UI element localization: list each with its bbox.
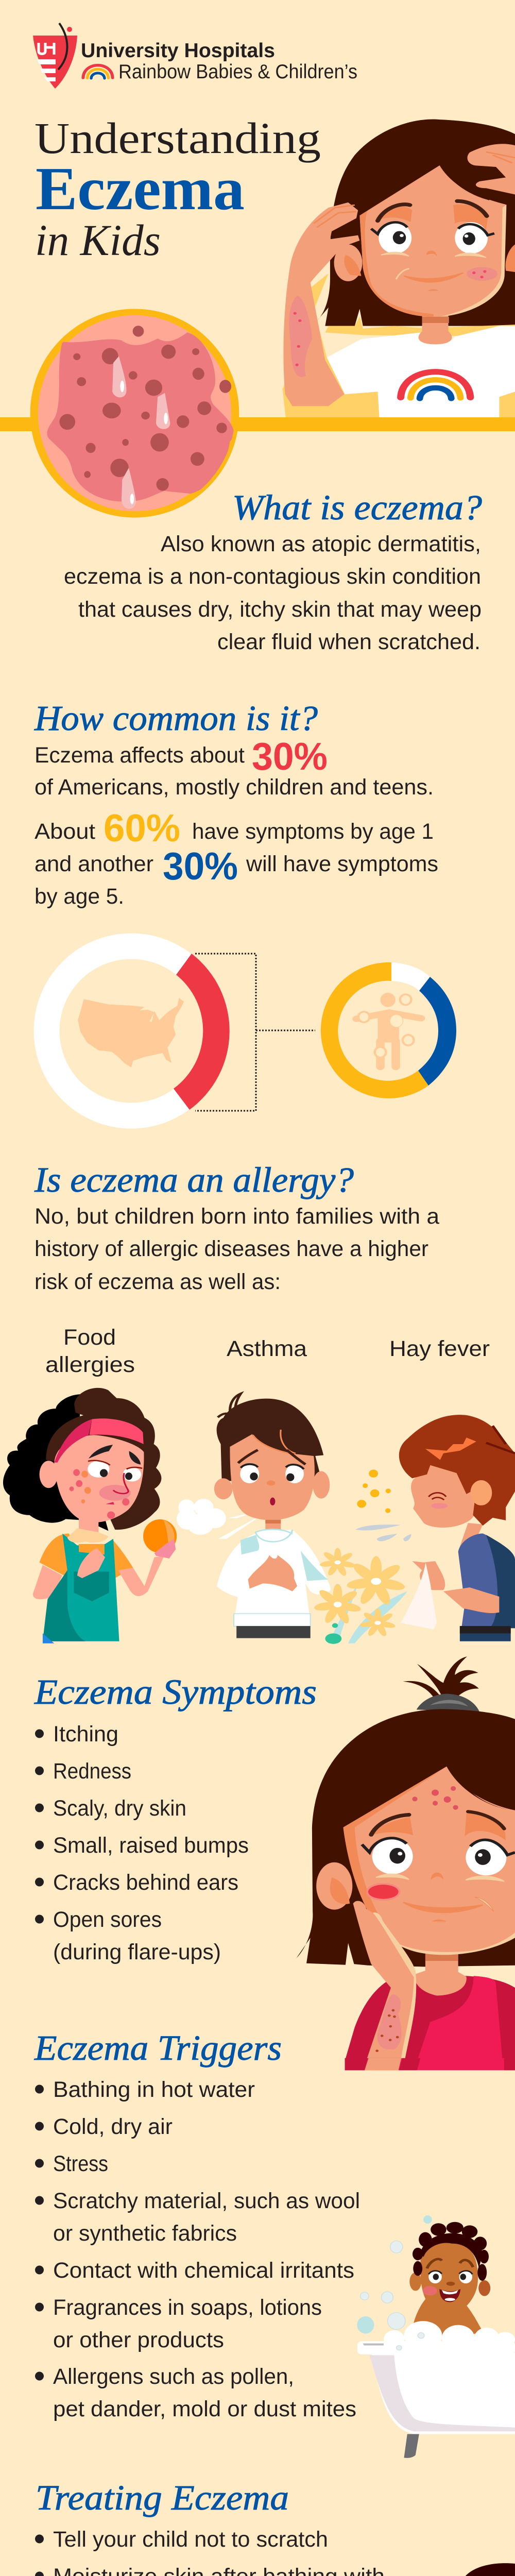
label: Asthma: Asthma	[227, 1336, 307, 1361]
list: triggers: Allergens such as pollen,	[53, 2364, 294, 2389]
text block: prevalence with statistics: of Americans, mostly children and teens.	[35, 775, 434, 800]
title line: in Kids: in Kids	[35, 215, 161, 265]
heading: What is eczema?: What is eczema?	[232, 488, 482, 527]
illustration: asthma boy	[214, 1394, 331, 1638]
text block: definition: eczema is a non-contagious skin condition	[64, 564, 481, 589]
list: symptoms: Scaly, dry skin	[53, 1796, 186, 1821]
text block: definition	[64, 532, 482, 654]
icon: rainbow	[83, 65, 113, 78]
chart: 30 percent of Americans donut	[46, 946, 230, 1116]
text block: prevalence with statistics: Eczema affects about	[35, 743, 245, 768]
text block: prevalence with statistics: and another	[35, 852, 153, 876]
title line: Eczema: Eczema	[36, 155, 245, 223]
list: triggers: Cold, dry air	[53, 2114, 173, 2139]
title line: Understanding: Understanding	[35, 113, 321, 163]
text block: prevalence with statistics: have symptoms by age 1	[192, 819, 434, 844]
section: what is eczema	[64, 488, 482, 654]
illustration: girl with glasses told not to scratch	[245, 2563, 515, 2576]
list: triggers: or synthetic fabrics	[53, 2221, 237, 2246]
logo: University Hospitals Rainbow Babies and Children's	[33, 23, 357, 89]
section: is eczema an allergy	[34, 1160, 490, 1377]
list: symptoms: (during flare-ups)	[53, 1940, 221, 1964]
heading: Treating Eczema: Treating Eczema	[36, 2478, 289, 2517]
list: symptoms: Cracks behind ears	[53, 1870, 238, 1895]
label: Hay fever: Hay fever	[389, 1336, 490, 1361]
list: treatments: Tell your child not to scratch	[53, 2527, 328, 2552]
icon: US map	[78, 998, 184, 1067]
list: triggers: or other products	[53, 2328, 224, 2352]
label: Food allergies: Food	[63, 1325, 116, 1350]
illustration: white breath cloud	[177, 1499, 267, 1539]
illustration: sleeve continuation	[345, 2058, 515, 2070]
chart: age of onset donut	[321, 962, 456, 1098]
text block: prevalence with statistics: will have symptoms	[246, 852, 438, 876]
illustration: girl with facial rash	[296, 1656, 515, 2061]
list: triggers	[35, 2077, 360, 2421]
list: triggers: Bathing in hot water	[53, 2077, 255, 2102]
text block: prevalence with statistics	[35, 735, 438, 909]
label: Food allergies	[45, 1325, 135, 1377]
illustration: baby in bathtub	[357, 2215, 515, 2458]
yellow band	[0, 417, 515, 431]
text block: prevalence with statistics: 60%	[104, 806, 180, 850]
section: how common is it	[34, 699, 438, 909]
illustration: hay fever boy sneezing	[355, 1415, 515, 1641]
text block: definition: clear fluid when scratched.	[217, 630, 480, 654]
icon: body with rash spots	[356, 993, 421, 1066]
text block: prevalence with statistics: 30%	[163, 844, 238, 888]
logo text: University Hospitals: University Hospitals	[81, 40, 275, 62]
section: eczema triggers	[34, 2028, 360, 2421]
connector: dotted bracket	[195, 954, 315, 1111]
text block: allergy explanation: history of allergic diseases have a higher	[35, 1236, 428, 1261]
illustration: flowers and stems	[314, 1548, 407, 1644]
illustration: magnified eczema skin	[34, 312, 235, 514]
illustration: girl scratching head	[282, 119, 515, 418]
list: symptoms: Redness	[53, 1759, 131, 1784]
list: symptoms: Small, raised bumps	[53, 1833, 249, 1858]
heading: Eczema Triggers: Eczema Triggers	[34, 2028, 282, 2067]
text block: prevalence with statistics: by age 5.	[35, 884, 124, 909]
list: triggers: pet dander, mold or dust mites	[53, 2397, 356, 2421]
text block: allergy explanation: No, but children born into families with a	[35, 1204, 439, 1229]
illustration: food allergy girl	[3, 1388, 177, 1643]
heading: Eczema Symptoms: Eczema Symptoms	[34, 1672, 317, 1711]
list: symptoms: Itching	[53, 1722, 118, 1747]
text block: prevalence with statistics: 30%	[252, 735, 328, 778]
logo text: Rainbow Babies and Children's: Rainbow Babies & Children’s	[118, 61, 357, 83]
list: treatments	[35, 2527, 385, 2576]
list: symptoms	[35, 1722, 249, 1964]
text block: allergy explanation	[35, 1204, 439, 1294]
text block: prevalence with statistics: About	[35, 819, 95, 844]
list: triggers: Fragrances in soaps, lotions	[53, 2295, 322, 2320]
list: triggers: Stress	[53, 2151, 108, 2176]
icon: UH shield	[33, 23, 77, 89]
text block: definition: Also known as atopic dermatitis,	[161, 532, 481, 556]
list: symptoms: Open sores	[53, 1907, 162, 1932]
section: treating eczema	[35, 2478, 385, 2576]
title	[35, 113, 321, 265]
heading: Is eczema an allergy?: Is eczema an allergy?	[34, 1160, 354, 1199]
list: triggers: Scratchy material, such as wool	[53, 2189, 360, 2213]
section: eczema symptoms	[34, 1672, 317, 1964]
list: triggers: Contact with chemical irritants	[53, 2258, 354, 2283]
text block: definition: that causes dry, itchy skin that may weep	[78, 597, 482, 622]
label: Food allergies: allergies	[45, 1352, 135, 1377]
icon: rainbow on shirt	[401, 372, 470, 398]
text block: allergy explanation: risk of eczema as well as:	[35, 1269, 281, 1294]
heading: How common is it?: How common is it?	[34, 699, 318, 738]
